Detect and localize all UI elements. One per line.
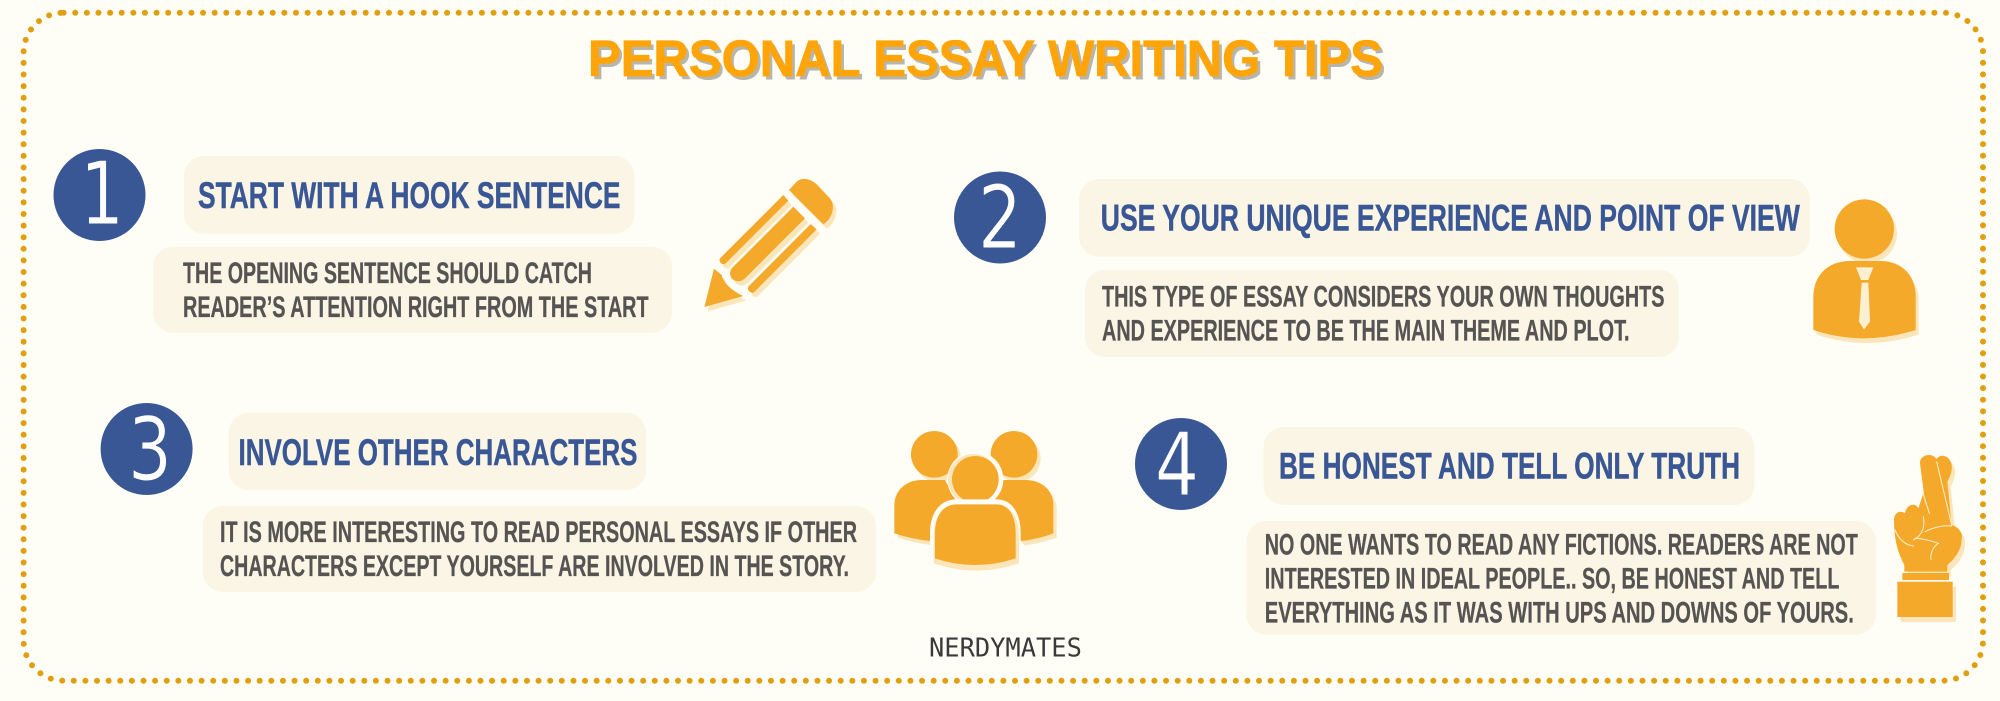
body text: tip 1: READER’S ATTENTION RIGHT FROM THE START: [183, 291, 649, 324]
body text: tip 3: CHARACTERS EXCEPT YOURSELF ARE INVOLVED IN THE STORY.: [220, 550, 849, 583]
icon: group of people: [894, 431, 1057, 568]
heading: start with a hook sentence: [184, 156, 634, 234]
icon: pencil: [704, 179, 836, 311]
heading: be honest: BE HONEST AND TELL ONLY TRUTH: [1279, 444, 1740, 486]
panel: tip 4: [1135, 414, 1965, 635]
body text: tip 2: THIS TYPE OF ESSAY CONSIDERS YOUR OWN THOUGHTS: [1102, 281, 1664, 314]
title: PERSONAL ESSAY WRITING TIPS: [591, 34, 1386, 90]
brand wordmark: NERDYMATES: [929, 633, 1082, 663]
number badge 3: 3: [128, 399, 172, 501]
heading: involve other characters: [229, 413, 646, 490]
panel: tip 2: [954, 167, 1919, 357]
number badge 2: 2: [978, 167, 1022, 269]
body text: tip 3: IT IS MORE INTERESTING TO READ PERSONAL ESSAYS IF OTHER: [220, 516, 857, 549]
number badge 1: 1: [80, 143, 124, 245]
body text: tip 1: [153, 247, 672, 333]
heading: start with a hook sentence: START WITH A HOOK SENTENCE: [198, 174, 620, 216]
heading: use your unique experience: [1079, 179, 1810, 257]
panel: tip 1: [54, 143, 836, 333]
body text: tip 4: [1246, 521, 1876, 635]
number badge 4: 4: [1155, 414, 1199, 516]
body text: tip 3: [203, 506, 876, 592]
body text: tip 2: [1085, 270, 1679, 357]
icon: person with tie: [1813, 199, 1919, 343]
heading: involve other characters: INVOLVE OTHER CHARACTERS: [238, 431, 638, 473]
number badge 4: [1135, 414, 1227, 516]
icon: crossed fingers hand: [1894, 455, 1965, 622]
number badge 1: [54, 143, 146, 245]
title: PERSONAL ESSAY WRITING TIPS: [588, 30, 1383, 87]
number badge 3: [101, 399, 193, 501]
body text: tip 1: THE OPENING SENTENCE SHOULD CATCH: [183, 257, 592, 290]
number badge 2: [954, 167, 1046, 269]
heading: be honest: [1264, 427, 1754, 505]
panel: tip 3: [101, 399, 1057, 592]
body text: tip 2: AND EXPERIENCE TO BE THE MAIN THEME AND PLOT.: [1102, 315, 1630, 348]
